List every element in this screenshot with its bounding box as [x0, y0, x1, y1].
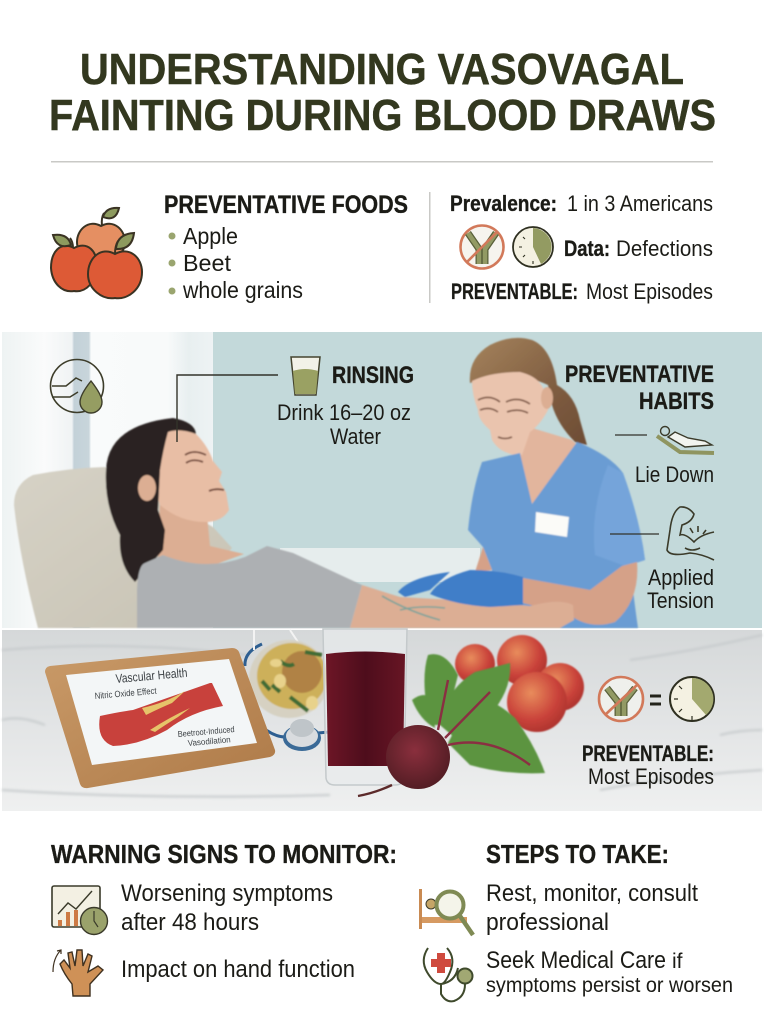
icon: flexed arm [667, 507, 714, 560]
chair [14, 467, 232, 628]
patient face [150, 429, 229, 522]
beet greens [412, 654, 545, 773]
label: lie down: Lie Down [635, 462, 714, 487]
text: rest and monitor [486, 880, 698, 936]
patient hair [106, 418, 196, 582]
patient facial features [185, 452, 224, 491]
patient top [137, 546, 362, 628]
bowl of soup [249, 640, 329, 718]
callout: rinsing: Drink 16–20 oz [277, 400, 411, 425]
list: foods [168, 223, 303, 303]
text: seek medical care: if [672, 950, 683, 973]
panel: clinic photo scene [2, 332, 762, 628]
heading: preventative habits: PREVENTATIVE [565, 361, 714, 388]
text: seek medical care [486, 947, 733, 997]
text: rest and monitor: professional [486, 909, 609, 936]
stat: data: Defections [616, 236, 713, 261]
stat: preventable [451, 279, 713, 304]
tablet labels: Vasodilation [187, 734, 231, 748]
stat: preventable: PREVENTABLE: [451, 279, 578, 304]
panel: preventative foods [164, 191, 408, 303]
veins [382, 596, 445, 620]
nurse ear [541, 387, 553, 409]
marble veins [2, 635, 762, 797]
nurse face [472, 372, 548, 455]
text: worsening symptoms: Worsening symptoms [121, 880, 333, 907]
tablet labels: Beetroot-Induced [177, 724, 235, 739]
list: foods: whole grains [182, 277, 303, 303]
tablet labels [94, 666, 235, 748]
panel: steps to take [419, 839, 733, 1001]
heading: preventative habits [565, 361, 714, 415]
callout: rinsing [277, 362, 414, 449]
icon: crossed antibody [460, 226, 504, 268]
stat: prevalence [450, 191, 713, 216]
icon: apples [51, 208, 142, 298]
callout: preventable: PREVENTABLE: [582, 741, 714, 766]
icon: clock [670, 677, 714, 721]
stat: data [564, 236, 713, 261]
callout: rinsing: RINSING [332, 362, 414, 389]
beetroot [358, 725, 450, 796]
beet stems [438, 680, 530, 765]
text: worsening symptoms: after 48 hours [121, 909, 259, 936]
illustration: patient and nurse [14, 338, 645, 628]
vessel diagram [99, 683, 223, 746]
icon: hand and drop [50, 360, 104, 413]
text: seek medical care: symptoms persist or worsen [486, 974, 733, 997]
marble surface [2, 630, 762, 811]
wall [213, 332, 762, 628]
callout: preventable [582, 741, 714, 789]
nurse hair back [470, 338, 587, 445]
stat: preventable: Most Episodes [586, 279, 713, 304]
glass of beet juice [323, 629, 407, 785]
nurse sleeve shading [594, 465, 645, 566]
icon: glass of water [291, 357, 320, 395]
icon: clock [513, 227, 553, 267]
icon: stethoscope with cross [424, 948, 472, 1001]
nurse scrubs [468, 442, 645, 628]
heading: preventative foods: PREVENTATIVE FOODS [164, 191, 408, 219]
stat: prevalence: Prevalence: [450, 191, 557, 216]
tablet labels: Nitric Oxide Effect [94, 686, 157, 701]
nurse neck [520, 425, 578, 504]
stat: prevalence: 1 in 3 Americans [567, 191, 713, 216]
stat: data: Data: [564, 236, 610, 261]
panel: marble table scene [2, 629, 762, 811]
text: impact on hand function: Impact on hand function [121, 956, 355, 983]
nurse arm [523, 562, 637, 625]
title: UNDERSTANDING VASOVAGAL [80, 45, 684, 94]
icon: bed and magnifier [419, 889, 473, 935]
callout: leader line [177, 375, 278, 442]
stethoscope [245, 630, 329, 751]
panel: warning signs [51, 839, 397, 996]
patient neck [158, 500, 244, 570]
apples [455, 635, 584, 732]
icon: equals sign [650, 696, 661, 704]
tablet labels: Vascular Health [115, 666, 188, 686]
curtain and window [2, 332, 214, 628]
label: applied tension [647, 565, 714, 613]
nurse badge [535, 512, 569, 537]
text: rest and monitor: Rest, monitor, consult [486, 880, 698, 907]
heading: steps to take: STEPS TO TAKE: [486, 839, 669, 869]
counter [280, 548, 480, 582]
icon: hand [53, 950, 103, 996]
heading: warning signs: WARNING SIGNS TO MONITOR: [51, 839, 397, 869]
label: applied tension: Tension [647, 588, 714, 613]
tablet [45, 648, 275, 788]
icon: lying down [657, 426, 714, 453]
patient ear [138, 475, 156, 501]
text: worsening symptoms [121, 880, 333, 936]
list: foods: Apple [183, 223, 238, 249]
patient arm [350, 585, 574, 628]
callout: preventable: Most Episodes [588, 764, 714, 789]
icon: crossed antibody [599, 677, 643, 721]
icon: chart and clock [52, 886, 108, 934]
callout: rinsing: Water [330, 424, 381, 449]
heading: preventative habits: HABITS [639, 388, 714, 415]
nurse facial features [478, 397, 530, 438]
title [49, 45, 716, 140]
list: foods: Beet [183, 250, 232, 276]
label: applied tension: Applied [648, 565, 714, 590]
nurse inner arm [475, 547, 492, 572]
panel: key statistics [450, 191, 713, 304]
text: seek medical care: Seek Medical Care [486, 947, 666, 974]
gloves [398, 570, 523, 607]
